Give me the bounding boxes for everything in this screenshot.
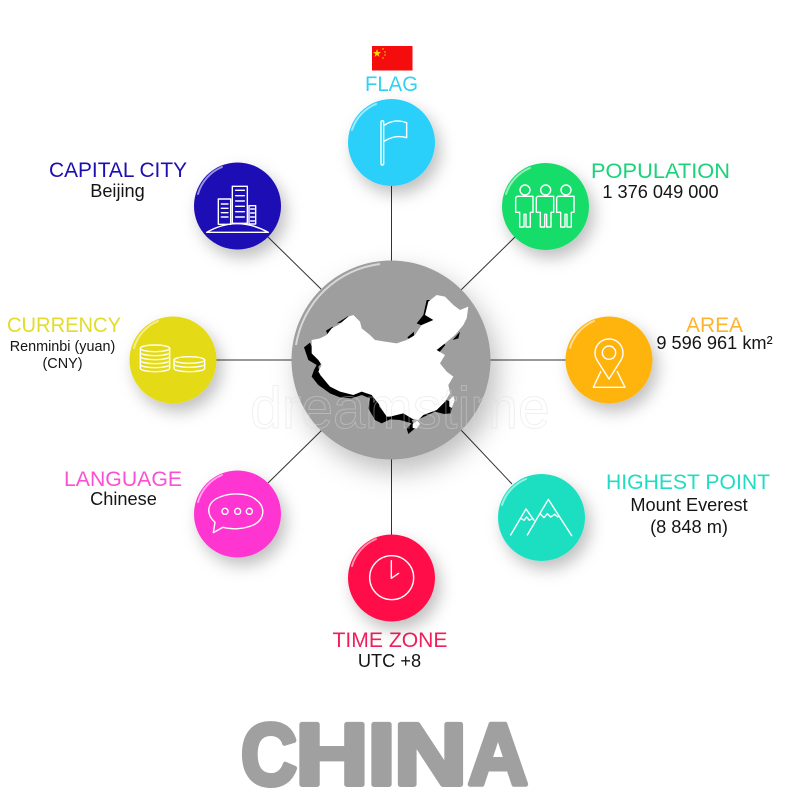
value line two: (8 848 m)	[650, 517, 728, 537]
icon: flag	[381, 121, 407, 165]
highlight	[352, 539, 376, 566]
heading: AREA	[686, 314, 743, 337]
disc highlight	[296, 264, 380, 345]
button	[194, 162, 281, 250]
icon: city	[207, 186, 268, 232]
heading: FLAG	[365, 73, 418, 96]
highlight	[502, 479, 526, 505]
icon: people	[516, 185, 574, 227]
button	[502, 163, 589, 250]
heading: HIGHEST POINT	[606, 471, 770, 494]
value: Mount Everest	[630, 495, 748, 515]
icon: clock	[370, 556, 414, 600]
item: area	[566, 314, 773, 404]
grey disc	[292, 260, 490, 460]
value: Beijing	[90, 181, 145, 201]
button	[130, 316, 216, 404]
value: UTC +8	[358, 651, 421, 671]
item: time zone	[332, 534, 448, 671]
button	[348, 534, 435, 622]
item: population	[502, 160, 730, 250]
central map disc	[250, 260, 550, 460]
icon: coins	[140, 345, 205, 372]
button	[348, 99, 435, 186]
heading: POPULATION	[591, 160, 730, 183]
item: currency	[7, 314, 216, 404]
button	[498, 474, 585, 561]
highlight	[570, 321, 594, 348]
button	[566, 316, 652, 404]
heading: CAPITAL CITY	[49, 159, 187, 182]
item: capital city	[49, 159, 281, 250]
highlight	[352, 104, 376, 130]
map of China	[304, 295, 468, 434]
icon: map pin	[593, 339, 625, 387]
highlight	[198, 167, 222, 194]
icon: mountains	[511, 499, 572, 536]
heading: CURRENCY	[7, 314, 121, 337]
button	[194, 470, 281, 558]
heading: TIME ZONE	[332, 629, 448, 652]
value: 9 596 961 km²	[656, 333, 773, 353]
item: flag	[348, 46, 435, 186]
connector lines	[216, 185, 566, 535]
item: highest point	[498, 471, 770, 561]
icon: speech bubble	[209, 494, 263, 533]
value: Renminbi (yuan)	[10, 339, 115, 355]
value: Chinese	[90, 489, 157, 509]
highlight	[134, 321, 158, 348]
heading: LANGUAGE	[64, 468, 182, 491]
title	[241, 706, 528, 800]
flag of China	[372, 46, 412, 70]
highlight	[198, 475, 222, 502]
item: language	[64, 468, 281, 558]
highlight	[506, 168, 530, 194]
value: 1 376 049 000	[602, 182, 719, 202]
value line two: (CNY)	[43, 356, 82, 372]
watermark: dreamstime	[250, 376, 550, 441]
